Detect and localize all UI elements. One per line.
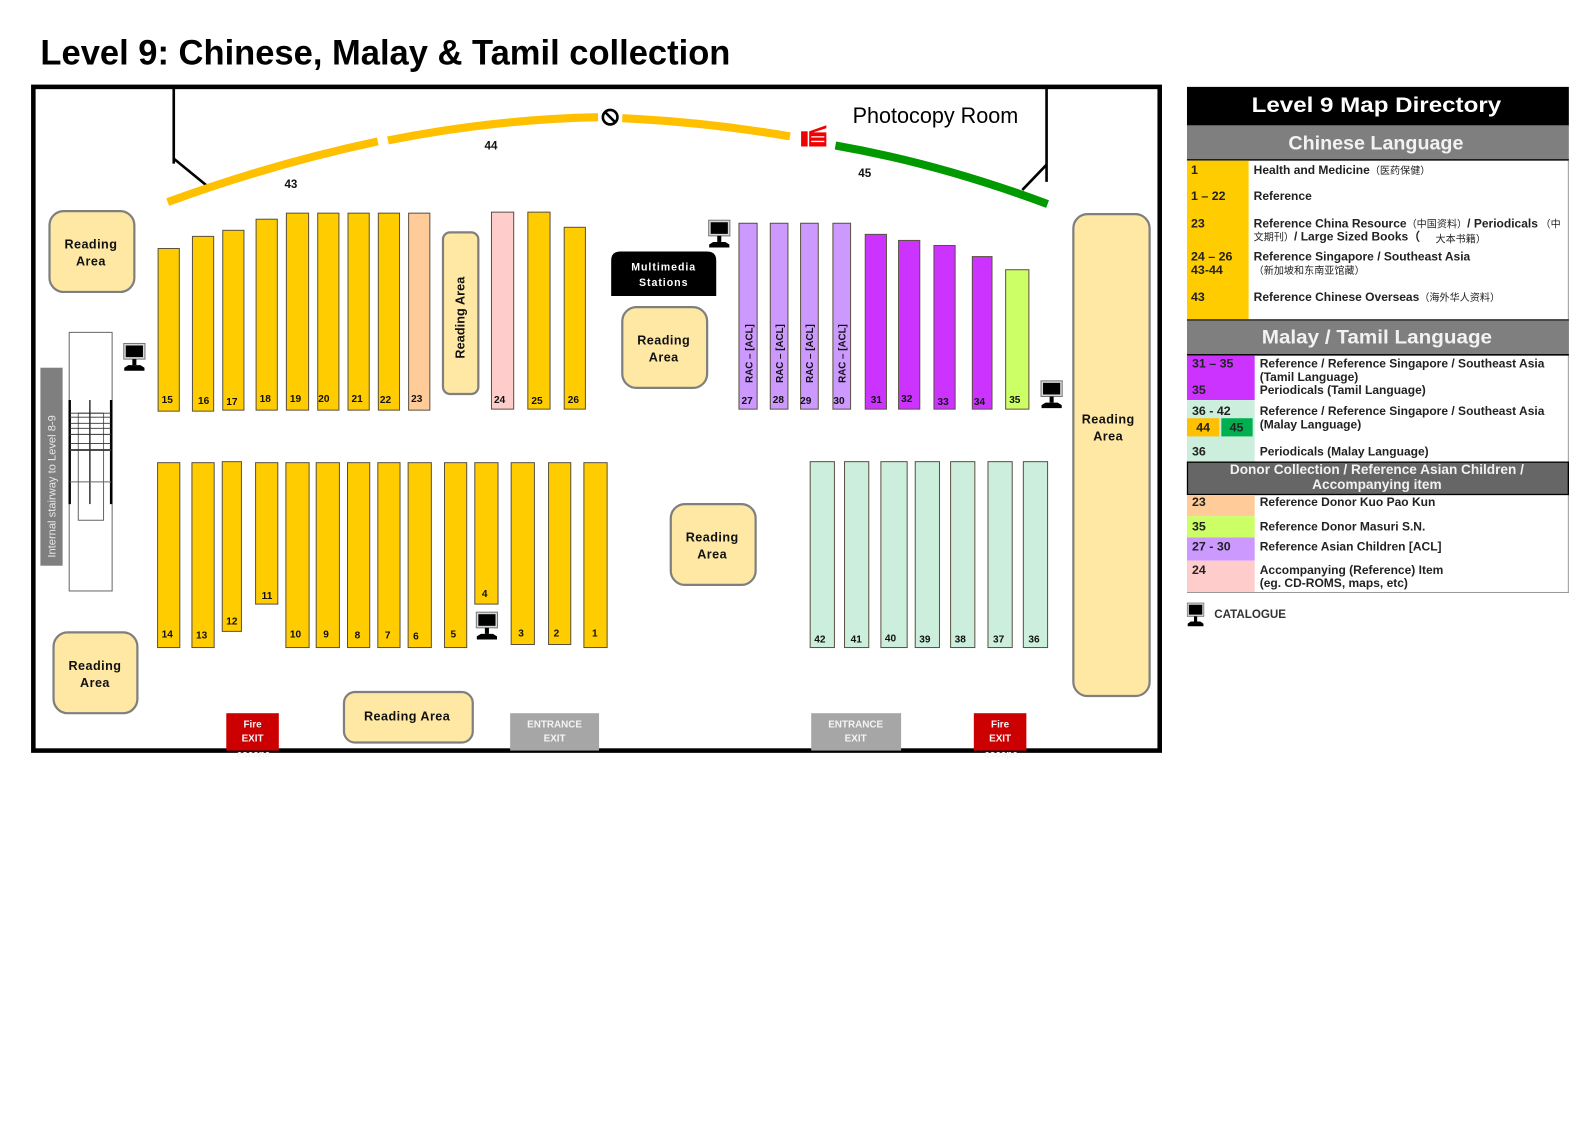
floor plan frame <box>33 87 1160 751</box>
top row shelf numbers: 30 <box>833 396 845 407</box>
top row shelf numbers: 20 <box>318 394 330 405</box>
RAC ACL shelf labels: RAC – [ACL] <box>745 324 756 383</box>
icon: photocopier <box>801 125 826 146</box>
bottom row shelf numbers: 37 <box>993 634 1005 645</box>
chinese language rows: 1 <box>1191 163 1198 177</box>
top row shelf numbers: 33 <box>937 397 949 408</box>
entrance exit left: EXIT <box>544 733 566 744</box>
bottom row shelf numbers: 6 <box>413 631 419 642</box>
fire exit left <box>226 713 279 761</box>
top row shelf numbers: 28 <box>773 395 784 406</box>
legend: catalogue <box>1187 603 1286 626</box>
bottom row shelf numbers: 10 <box>290 629 302 640</box>
malay tamil rows: Periodicals (Malay Language) <box>1260 445 1429 459</box>
bottom row shelf numbers: 5 <box>451 629 457 640</box>
photocopy room walls <box>174 88 1047 190</box>
malay tamil rows: Periodicals (Tamil Language) <box>1260 383 1426 397</box>
chinese language rows: Health and Medicine（医药保健） <box>1254 163 1430 177</box>
heading: chinese language: Chinese Language <box>1288 133 1463 155</box>
donor rows: 24 <box>1192 563 1206 577</box>
reading area: centre top: Area <box>649 351 679 365</box>
internal stairway <box>69 332 112 591</box>
icon: catalogue shelf 4 <box>476 612 498 639</box>
photocopy room label: Photocopy Room <box>853 103 1018 128</box>
donor rows: Accompanying (Reference) Item <box>1260 563 1443 577</box>
top row shelf numbers: 16 <box>198 396 210 407</box>
top row shelf numbers: 27 <box>741 396 753 407</box>
chinese language rows: （中 <box>1541 217 1561 230</box>
shelf label 45: 45 <box>858 167 872 180</box>
top row shelf numbers: 29 <box>800 396 812 407</box>
bottom row shelf numbers: 13 <box>196 630 208 641</box>
reading area: bottom left: Area <box>80 676 110 690</box>
panel: map directory <box>1187 87 1569 593</box>
reading area: right: Reading <box>1082 412 1135 426</box>
chinese language rows: Reference Chinese Overseas（海外华人资料） <box>1254 290 1500 304</box>
donor rows <box>1187 495 1569 593</box>
fire exit left: Fire <box>243 719 262 730</box>
chinese language rows: Reference Singapore / Southeast Asia <box>1254 250 1471 264</box>
top row shelf numbers: 34 <box>974 397 985 408</box>
top row shelf numbers: 23 <box>411 394 423 405</box>
top row shelf numbers: 18 <box>260 394 271 405</box>
top row shelf numbers: 35 <box>1009 395 1021 406</box>
bottom row shelf numbers: 3 <box>518 628 524 639</box>
reading area: top left <box>49 211 134 292</box>
bottom row shelf numbers: 1 <box>592 628 598 639</box>
curved shelf 44 <box>388 117 790 140</box>
bottom row shelf numbers: 40 <box>885 633 897 644</box>
RAC ACL shelf labels: RAC – [ACL] <box>838 324 849 383</box>
malay tamil rows: Reference / Reference Singapore / Southeast Asia <box>1260 404 1545 418</box>
RAC ACL shelf labels <box>745 324 849 383</box>
bottom row shelf numbers: 4 <box>482 589 488 600</box>
fire exit left: EXIT <box>242 733 264 744</box>
chinese language rows: （新加坡和东南亚馆藏） <box>1254 264 1365 277</box>
bottom row shelf numbers: 41 <box>851 634 862 645</box>
bottom row shelves <box>158 462 1048 648</box>
heading: malay tamil language <box>1187 319 1569 356</box>
top row shelf numbers: 31 <box>871 395 882 406</box>
reading area: vertical: Reading Area <box>454 276 468 359</box>
legend: catalogue: CATALOGUE <box>1214 608 1286 621</box>
donor rows: Reference Asian Children [ACL] <box>1260 540 1442 554</box>
donor rows: Reference Donor Kuo Pao Kun <box>1260 495 1435 509</box>
shelf label 44: 44 <box>484 140 498 153</box>
bottom row shelf numbers <box>162 589 1040 645</box>
bottom row shelf numbers: 7 <box>385 630 391 641</box>
icon: catalogue right <box>1041 381 1062 408</box>
multimedia stations: Multimedia <box>631 262 696 274</box>
top row shelves <box>158 212 1029 411</box>
bottom row shelf numbers: 42 <box>814 634 826 645</box>
top row shelf numbers: 17 <box>226 397 238 408</box>
multimedia stations: Stations <box>639 277 688 289</box>
malay tamil rows: 45 <box>1230 420 1243 434</box>
top row shelf numbers: 21 <box>352 394 363 405</box>
entrance exit right: EXIT <box>845 733 867 744</box>
reading area: bottom <box>344 692 473 742</box>
internal stairway label: Internal stairway to Level 8-9 <box>47 415 59 558</box>
donor rows: 27 - 30 <box>1192 540 1231 554</box>
directory title: Level 9 Map Directory <box>1252 94 1501 117</box>
reading area: centre top: Reading <box>637 333 690 347</box>
malay tamil rows: 35 <box>1192 383 1206 397</box>
heading: chinese language <box>1187 125 1569 161</box>
reading area: top left: Reading <box>64 238 117 252</box>
heading: donor collection: Accompanying item <box>1312 477 1442 492</box>
reading area: bottom: Reading Area <box>364 709 451 723</box>
donor rows: 23 <box>1192 495 1206 509</box>
malay tamil rows: (Malay Language) <box>1260 417 1361 431</box>
fire exit right: escape <box>984 750 1018 761</box>
fire exit right <box>974 713 1026 761</box>
reading area: bottom left <box>54 632 137 713</box>
chinese language rows <box>1187 161 1569 593</box>
bottom row shelf numbers: 9 <box>323 629 329 640</box>
chinese language rows: Reference <box>1254 189 1312 203</box>
title: Level 9: Chinese, Malay & Tamil collection <box>40 34 730 73</box>
RAC ACL shelf labels: RAC – [ACL] <box>775 324 786 383</box>
bottom row shelf numbers: 36 <box>1028 634 1040 645</box>
fire exit right: Fire <box>991 719 1010 730</box>
top row shelf numbers: 15 <box>162 395 173 406</box>
bottom row shelf numbers: 38 <box>955 634 966 645</box>
entrance exit right: ENTRANCE <box>828 719 883 730</box>
entrance exit left: ENTRANCE <box>527 719 582 730</box>
chinese language rows: 大本书籍） <box>1435 232 1486 245</box>
internal stairway label <box>40 368 63 566</box>
chinese language rows: 43-44 <box>1191 263 1223 277</box>
no entry icon <box>603 110 617 124</box>
reading area: vertical <box>443 232 478 394</box>
bottom row shelf numbers: 39 <box>919 634 931 645</box>
top row shelf numbers: 24 <box>494 395 506 406</box>
reading area: centre bottom <box>671 504 756 585</box>
malay tamil rows: 36 - 42 <box>1192 404 1231 418</box>
donor rows: Reference Donor Masuri S.N. <box>1260 519 1425 533</box>
fire exit left: escape <box>237 750 271 761</box>
reading area: right: Area <box>1093 429 1124 443</box>
heading: donor collection: Donor Collection / Reference Asian Children / <box>1230 462 1524 477</box>
chinese language rows: Reference China Resource（中国资料）/ Periodicals <box>1254 216 1538 230</box>
top row shelf numbers <box>162 394 1021 408</box>
icon: catalogue multimedia <box>709 220 730 247</box>
malay tamil rows: Reference / Reference Singapore / Southeast Asia <box>1260 357 1545 371</box>
heading: malay tamil language: Malay / Tamil Language <box>1262 326 1492 348</box>
icon: catalogue stairs <box>124 343 145 371</box>
donor rows: (eg. CD-ROMS, maps, etc) <box>1260 576 1408 590</box>
top row shelf numbers: 25 <box>531 396 543 407</box>
bottom row shelf numbers: 12 <box>226 616 238 627</box>
multimedia stations <box>611 252 716 296</box>
chinese language rows: 43 <box>1191 290 1205 304</box>
malay tamil rows: (Tamil Language) <box>1260 370 1358 384</box>
directory title <box>1187 87 1569 126</box>
reading area: right <box>1073 214 1150 696</box>
RAC ACL shelf labels: RAC – [ACL] <box>805 324 816 383</box>
malay tamil rows: 44 <box>1196 420 1210 434</box>
fire exit right: EXIT <box>989 733 1011 744</box>
reading area: centre bottom: Reading <box>686 530 739 544</box>
shelf label 43: 43 <box>284 178 298 191</box>
chinese language rows: 23 <box>1191 216 1205 230</box>
bottom row shelf numbers: 14 <box>162 629 173 640</box>
reading area: centre bottom: Area <box>697 548 728 562</box>
chinese language rows: 1 – 22 <box>1191 189 1226 203</box>
bottom row shelf numbers: 11 <box>262 591 273 602</box>
heading: donor collection <box>1187 462 1568 494</box>
curved shelf 43 <box>168 141 378 202</box>
top row shelf numbers: 32 <box>901 394 913 405</box>
chinese language rows: 24 – 26 <box>1191 250 1233 264</box>
bottom row shelf numbers: 2 <box>554 628 560 639</box>
chinese language rows: 文期刊）/ Large Sized Books（ <box>1254 229 1420 243</box>
curved shelf 45 <box>835 145 1048 204</box>
top row shelf numbers: 22 <box>380 395 391 406</box>
malay tamil rows <box>1187 356 1545 462</box>
reading area: top left: Area <box>76 255 106 269</box>
entrance exit right <box>811 713 901 751</box>
top row shelf numbers: 19 <box>290 394 302 405</box>
top row shelf numbers: 26 <box>568 395 579 406</box>
reading area: bottom left: Reading <box>68 659 121 673</box>
bottom row shelf numbers: 8 <box>355 630 361 641</box>
reading area: centre top <box>622 307 707 388</box>
malay tamil rows: 36 <box>1192 445 1206 459</box>
entrance exit left <box>510 713 599 751</box>
malay tamil rows: 31 – 35 <box>1192 357 1234 371</box>
donor rows: 35 <box>1192 519 1206 533</box>
